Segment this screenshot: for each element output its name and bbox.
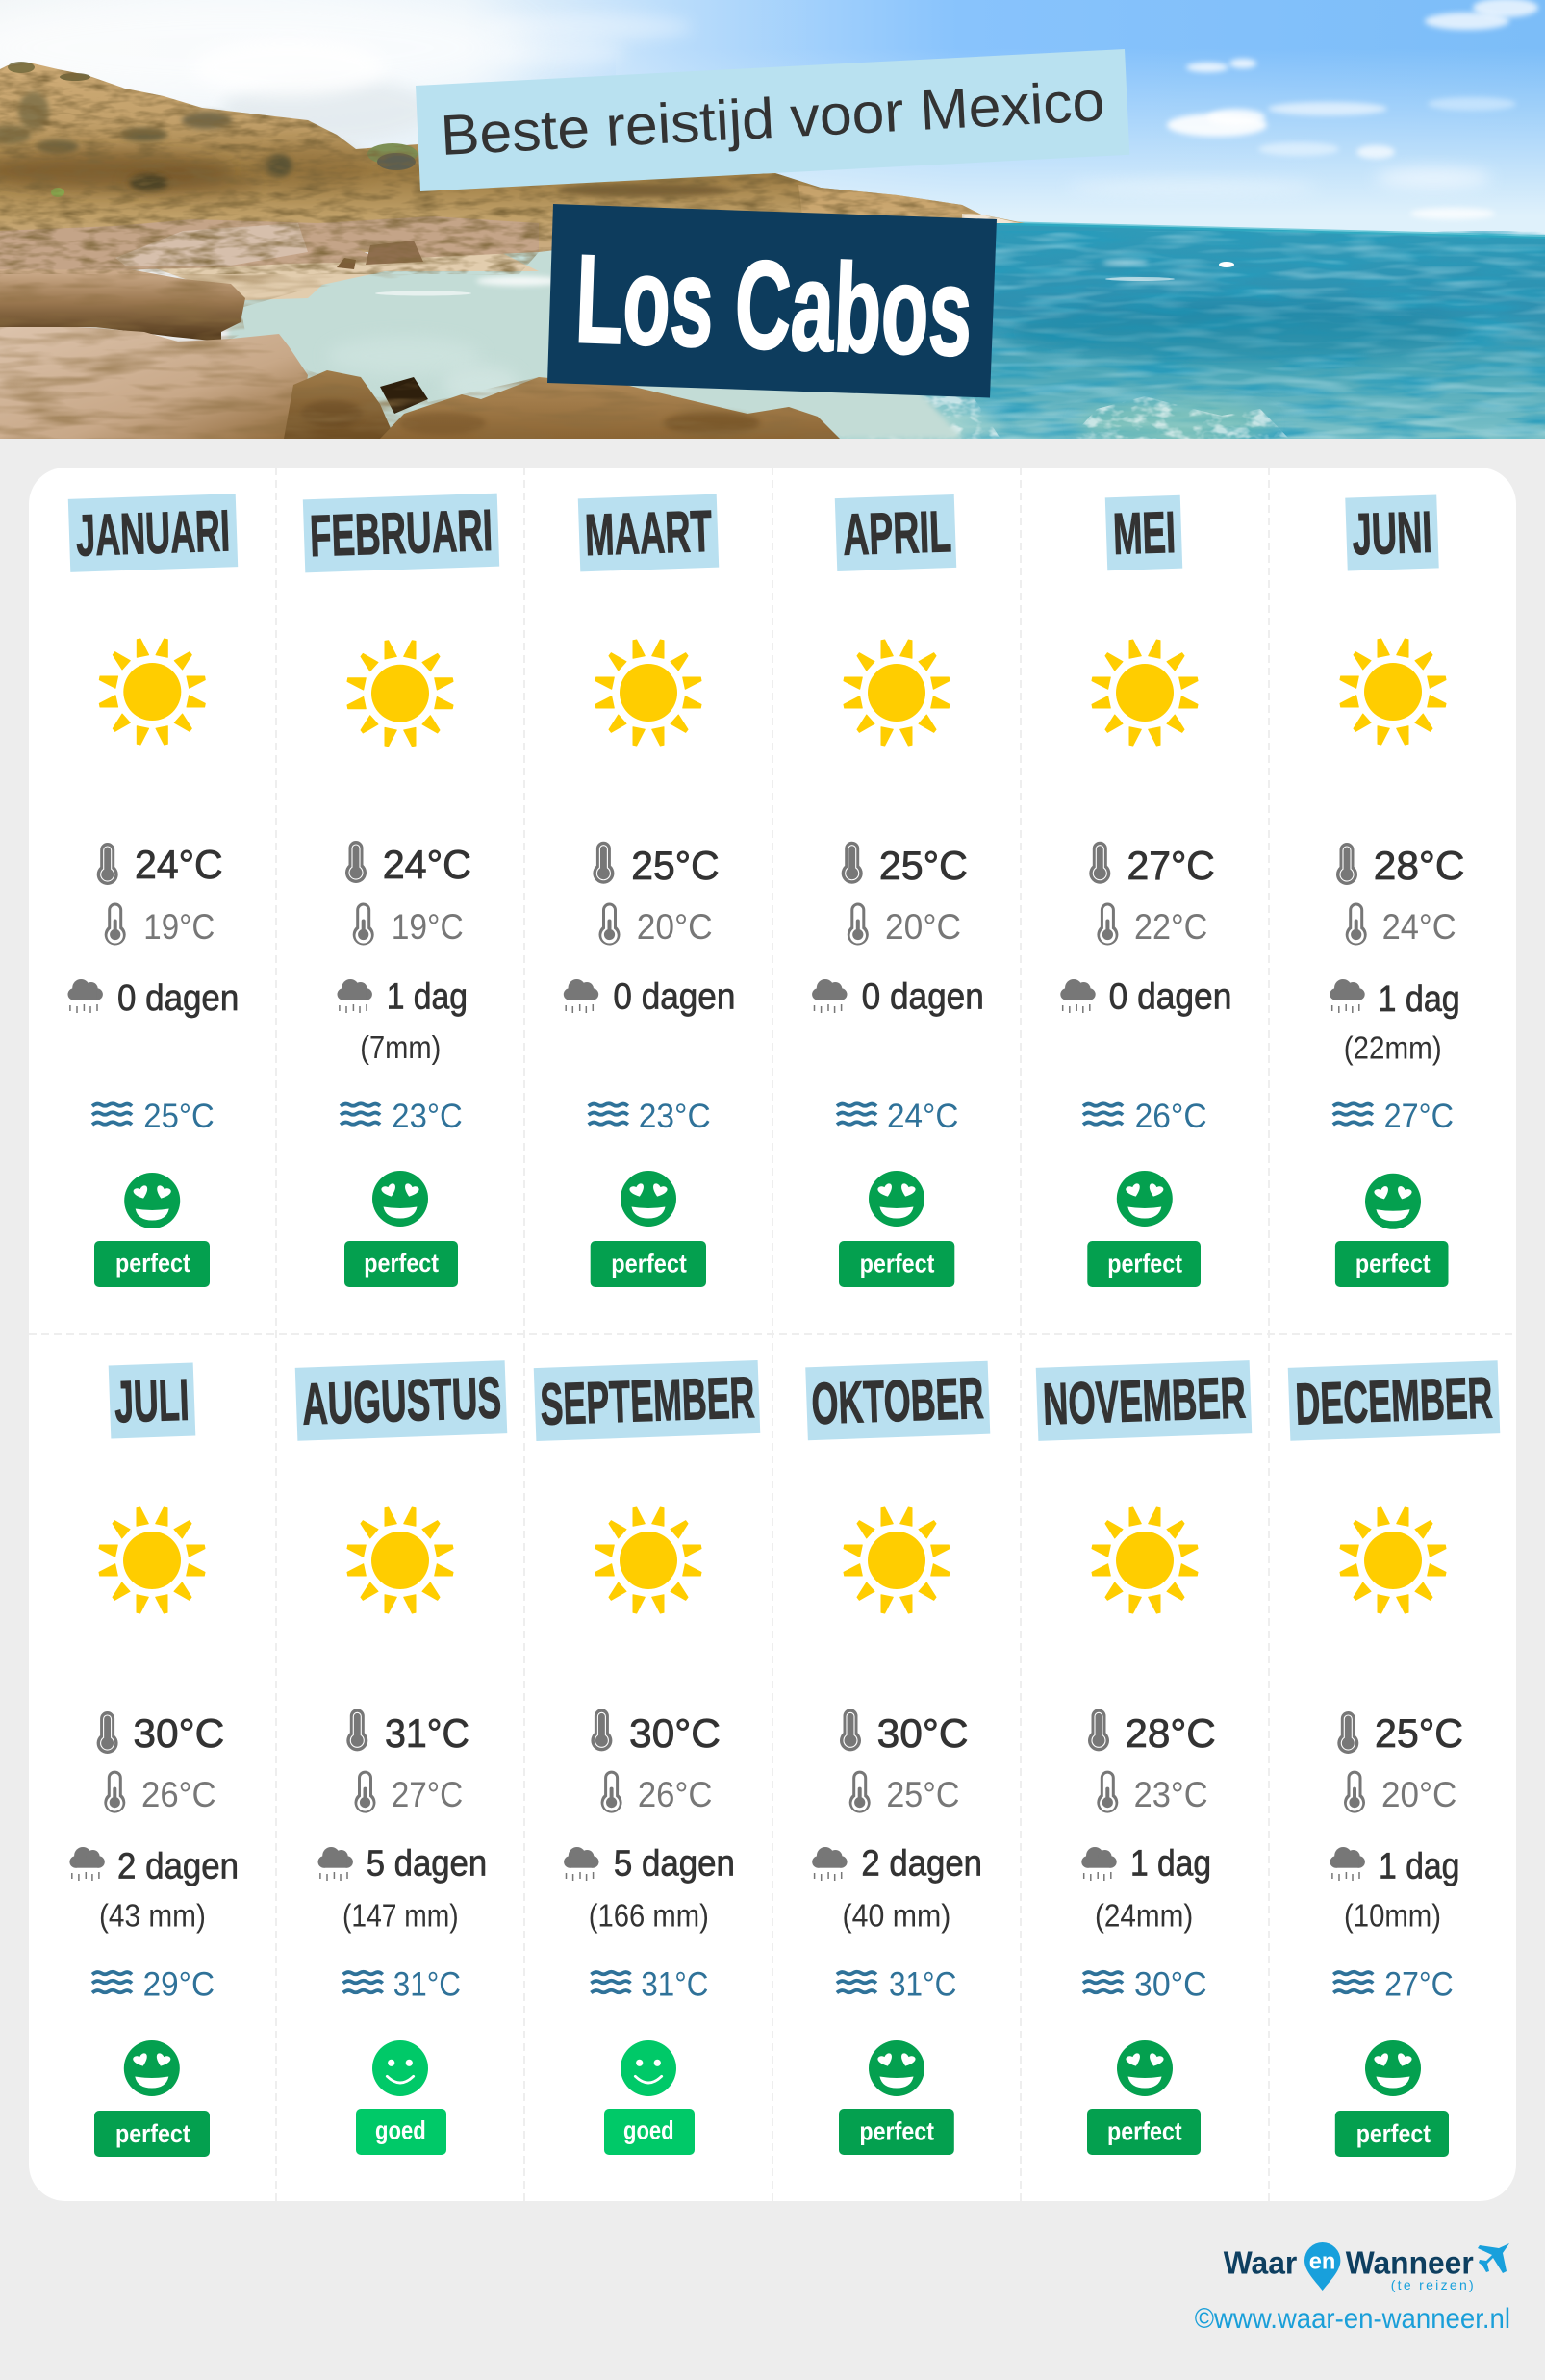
- month label: APRIL: [842, 498, 952, 568]
- sea temperature: 31°C: [393, 1965, 461, 2003]
- icon: min thermometer: [354, 1771, 375, 1813]
- rain days: 0 dagen: [1109, 977, 1231, 1018]
- icon: waves: [1083, 1972, 1123, 1993]
- rating badge: perfect: [859, 2116, 934, 2145]
- icon: max thermometer: [840, 1709, 861, 1751]
- icon: sun: [844, 640, 950, 746]
- rain days: 0 dagen: [117, 978, 239, 1019]
- icon: sun: [595, 640, 701, 746]
- icon: waves: [343, 1972, 383, 1993]
- icon: sun: [1092, 1507, 1198, 1613]
- month label: JUNI: [1351, 499, 1433, 567]
- icon: min thermometer: [601, 1771, 622, 1813]
- rain days: 1 dag: [1378, 979, 1460, 1020]
- panel: November: [1036, 1360, 1252, 2155]
- rating badge: perfect: [1107, 1249, 1182, 1278]
- rating badge: [604, 2109, 695, 2155]
- icon: sun: [347, 641, 453, 747]
- rating badge: [1335, 2111, 1449, 2157]
- rating badge: [839, 2109, 954, 2155]
- icon: max thermometer: [345, 841, 367, 883]
- rainfall: (43 mm): [99, 1897, 206, 1934]
- rating badge: perfect: [860, 1249, 934, 1278]
- sea temperature: 23°C: [392, 1098, 463, 1135]
- sea temperature: 30°C: [1134, 1965, 1207, 2003]
- sea temperature: 27°C: [1384, 1098, 1454, 1135]
- month label: [109, 1362, 195, 1439]
- icon: max thermometer: [346, 1709, 367, 1751]
- max temperature: 28°C: [1125, 1710, 1216, 1756]
- icon: perfect smiley: [124, 1173, 180, 1228]
- icon: rain cloud: [812, 979, 847, 1013]
- icon: max thermometer: [97, 1711, 118, 1754]
- month label: [1105, 495, 1182, 570]
- min temperature: 19°C: [392, 907, 464, 947]
- cliff: [0, 62, 1025, 260]
- icon: min thermometer: [1344, 1771, 1365, 1813]
- rainfall: (7mm): [360, 1029, 441, 1065]
- sea temperature: 31°C: [641, 1965, 708, 2003]
- land texture: [0, 63, 1019, 439]
- icon: perfect smiley: [621, 1171, 676, 1227]
- icon: min thermometer: [353, 902, 374, 946]
- min temperature: 20°C: [885, 907, 961, 947]
- icon: rain cloud: [564, 979, 598, 1013]
- icon: max thermometer: [1336, 843, 1357, 885]
- icon: max thermometer: [842, 842, 863, 884]
- panel: Juni: [1330, 494, 1464, 1287]
- max temperature: 25°C: [1375, 1710, 1463, 1756]
- month label: [534, 1360, 760, 1441]
- icon: min thermometer: [105, 902, 126, 946]
- panel: Februari: [303, 494, 499, 1287]
- icon: plane: [1478, 2243, 1509, 2273]
- lagoon and sand: [157, 250, 962, 439]
- rain days: 1 dag: [1130, 1844, 1211, 1885]
- panel: Augustus: [295, 1360, 507, 2155]
- icon: rain cloud: [1060, 979, 1096, 1013]
- icon: waves: [1083, 1103, 1123, 1125]
- max temperature: 30°C: [629, 1710, 721, 1756]
- panel: Oktober: [805, 1361, 990, 2155]
- icon: rain cloud: [1330, 1847, 1365, 1881]
- brown boulders: [284, 370, 840, 439]
- min temperature: 20°C: [637, 907, 713, 947]
- min temperature: 26°C: [638, 1775, 712, 1814]
- rating badge: [839, 1241, 954, 1287]
- rainfall: (40 mm): [843, 1897, 950, 1934]
- month label: [303, 494, 499, 572]
- rain days: 5 dagen: [614, 1844, 735, 1885]
- icon: waves: [341, 1103, 380, 1125]
- min temperature: 23°C: [1134, 1775, 1208, 1814]
- max temperature: 31°C: [385, 1710, 469, 1756]
- icon: sun: [844, 1507, 950, 1613]
- panel: Juli: [69, 1362, 239, 2157]
- icon: waves: [837, 1972, 876, 1993]
- rain days: 1 dag: [1379, 1847, 1459, 1887]
- rating badge: perfect: [1356, 2119, 1431, 2148]
- icon: waves: [837, 1103, 876, 1125]
- min temperature: 22°C: [1134, 907, 1207, 947]
- icon: sun: [1092, 640, 1198, 746]
- icon: waves: [92, 1972, 132, 1993]
- icon: good smiley: [372, 2040, 428, 2096]
- rating badge: perfect: [115, 1249, 190, 1278]
- icon: rain cloud: [1330, 979, 1365, 1013]
- panel: December: [1288, 1360, 1500, 2157]
- panel: climate table: [29, 468, 1516, 2201]
- icon: min thermometer: [1346, 902, 1367, 946]
- max temperature: 25°C: [631, 843, 720, 888]
- month label: [835, 494, 956, 571]
- title banner: Los Cabos: [573, 228, 975, 382]
- icon: rain cloud: [67, 979, 103, 1013]
- panel: Maart: [564, 494, 735, 1287]
- month label: [68, 494, 238, 572]
- sea temperature: 27°C: [1384, 1965, 1454, 2003]
- header photo: coast of Los Cabos: [0, 0, 1545, 446]
- subtitle banner: Beste reistijd voor Mexico: [439, 69, 1106, 167]
- front rock: [0, 327, 308, 439]
- icon: sun: [99, 639, 205, 745]
- icon: rain cloud: [1081, 1847, 1117, 1881]
- pale rock shelf: [0, 216, 539, 270]
- logo tagline: (te reizen): [1391, 2277, 1474, 2292]
- sea temperature: 31°C: [889, 1965, 956, 2003]
- rainfall: (166 mm): [589, 1897, 709, 1934]
- sea: [837, 221, 1545, 439]
- min temperature: 25°C: [886, 1775, 959, 1814]
- rating badge: [1087, 1241, 1201, 1287]
- icon: rain cloud: [337, 979, 372, 1013]
- max temperature: 30°C: [877, 1710, 969, 1756]
- icon: waves: [1333, 1972, 1373, 1993]
- rating badge: [1087, 2109, 1201, 2155]
- icon: rain cloud: [564, 1847, 598, 1881]
- rating badge: goed: [623, 2115, 674, 2144]
- logo: Waar en Wanneer: [1224, 2242, 1509, 2292]
- min temperature: 19°C: [143, 907, 215, 947]
- icon: waves: [591, 1972, 630, 1993]
- rain days: 2 dagen: [861, 1844, 982, 1885]
- icon: max thermometer: [1337, 1711, 1358, 1754]
- rain days: 0 dagen: [613, 977, 735, 1018]
- rain days: 1 dag: [387, 976, 468, 1017]
- month label: [295, 1360, 507, 1441]
- subtitle banner: [416, 49, 1129, 191]
- sea temperature: 24°C: [887, 1098, 958, 1135]
- rating badge: perfect: [611, 1249, 687, 1278]
- rainfall: (24mm): [1095, 1897, 1193, 1934]
- month label: [805, 1361, 990, 1440]
- month label: JULI: [114, 1367, 190, 1434]
- icon: rain cloud: [69, 1847, 105, 1881]
- rating badge: perfect: [115, 2119, 190, 2148]
- rainfall: (22mm): [1344, 1030, 1442, 1066]
- icon: waves: [589, 1103, 628, 1125]
- icon: perfect smiley: [1365, 1174, 1421, 1229]
- icon: rain cloud: [812, 1847, 848, 1881]
- icon: min thermometer: [848, 902, 869, 946]
- icon: map pin with en: [1304, 2242, 1340, 2291]
- rainfall: (10mm): [1344, 1897, 1441, 1934]
- rating badge: [94, 2111, 210, 2157]
- sea temperature: 26°C: [1135, 1098, 1207, 1135]
- logo word: Wanneer: Wanneer: [1346, 2244, 1474, 2280]
- icon: min thermometer: [849, 1771, 871, 1813]
- rating badge: [344, 1241, 458, 1287]
- icon: sun: [595, 1507, 701, 1613]
- icon: sun: [347, 1507, 453, 1613]
- icon: waves: [1333, 1103, 1373, 1125]
- icon: sun: [1340, 639, 1446, 745]
- max temperature: 27°C: [1127, 843, 1215, 888]
- month label: NOVEMBER: [1042, 1364, 1247, 1437]
- icon: perfect smiley: [372, 1171, 428, 1227]
- icon: max thermometer: [593, 842, 614, 884]
- rating badge: goed: [375, 2115, 426, 2144]
- mid rock: [0, 269, 245, 342]
- rating badge: [94, 1241, 210, 1287]
- max temperature: 25°C: [879, 843, 968, 888]
- rating badge: [591, 1241, 706, 1287]
- icon: sun: [99, 1507, 205, 1613]
- panel: April: [812, 494, 984, 1287]
- min temperature: 24°C: [1382, 907, 1456, 947]
- icon: good smiley: [621, 2040, 676, 2096]
- rating badge: perfect: [364, 1249, 439, 1278]
- logo word: Waar: Waar: [1224, 2244, 1297, 2280]
- icon: waves: [92, 1103, 132, 1125]
- month label: AUGUSTUS: [301, 1364, 502, 1437]
- icon: max thermometer: [1088, 1709, 1109, 1751]
- max temperature: 24°C: [135, 842, 223, 887]
- max temperature: 30°C: [133, 1710, 224, 1756]
- sea temperature: 23°C: [639, 1098, 711, 1135]
- icon: rain cloud: [317, 1847, 353, 1881]
- max temperature: 28°C: [1374, 843, 1464, 888]
- icon: perfect smiley: [1117, 1171, 1173, 1227]
- month label: [578, 494, 719, 571]
- icon: perfect smiley: [124, 2040, 180, 2096]
- month label: JANUARI: [75, 497, 231, 569]
- icon: min thermometer: [1097, 902, 1118, 946]
- website url: ©www.waar-en-wanneer.nl: [1195, 2303, 1510, 2335]
- icon: perfect smiley: [1117, 2040, 1173, 2096]
- month label: SEPTEMBER: [539, 1364, 756, 1437]
- month label: MAART: [584, 498, 713, 568]
- icon: perfect smiley: [1365, 2040, 1421, 2096]
- icon: perfect smiley: [869, 2040, 924, 2096]
- month label: [1345, 494, 1439, 571]
- icon: max thermometer: [591, 1709, 612, 1751]
- panel: Mei: [1060, 495, 1231, 1287]
- rain days: 2 dagen: [117, 1847, 239, 1887]
- icon: max thermometer: [1089, 842, 1110, 884]
- rating badge: [356, 2109, 446, 2155]
- panel: September: [534, 1360, 760, 2155]
- month label: [1036, 1360, 1252, 1441]
- min temperature: 26°C: [141, 1775, 216, 1814]
- rain days: 0 dagen: [862, 977, 984, 1018]
- icon: min thermometer: [598, 902, 620, 946]
- icon: max thermometer: [97, 843, 118, 885]
- month label: OKTOBER: [810, 1365, 985, 1436]
- rating badge: perfect: [1107, 2116, 1182, 2145]
- icon: sun: [1340, 1507, 1446, 1613]
- min temperature: 27°C: [392, 1775, 463, 1814]
- max temperature: 24°C: [383, 842, 471, 887]
- sky: [0, 0, 1545, 250]
- title banner: [547, 204, 997, 398]
- month label: FEBRUARI: [309, 497, 494, 569]
- month label: MEI: [1112, 499, 1177, 567]
- rating badge: perfect: [1355, 1249, 1431, 1278]
- icon: perfect smiley: [869, 1171, 924, 1227]
- sea temperature: 29°C: [143, 1965, 215, 2003]
- rating badge: [1335, 1241, 1449, 1287]
- min temperature: 20°C: [1381, 1775, 1456, 1814]
- sea temperature: 25°C: [143, 1098, 215, 1135]
- rainfall: (147 mm): [342, 1897, 459, 1934]
- panel: Januari: [67, 494, 239, 1287]
- icon: min thermometer: [104, 1771, 125, 1813]
- icon: map pin with en: en: [1309, 2248, 1335, 2274]
- rain days: 5 dagen: [367, 1844, 487, 1885]
- icon: min thermometer: [1097, 1771, 1118, 1813]
